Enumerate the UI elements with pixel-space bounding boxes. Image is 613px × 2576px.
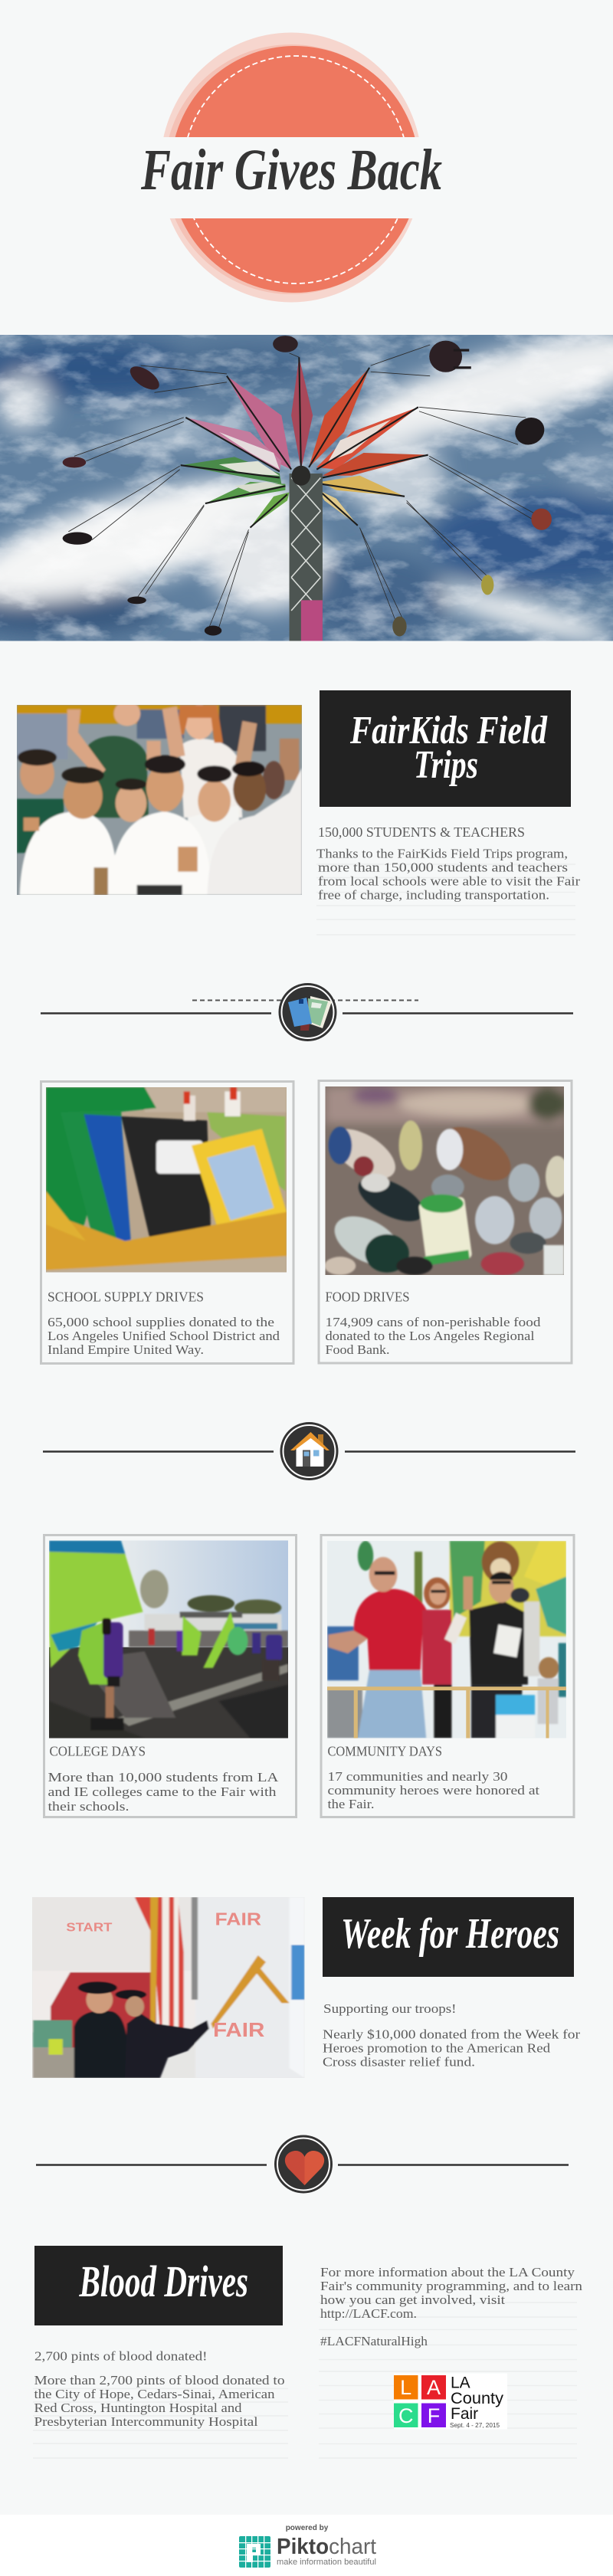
logo: LA County Fair: Sept. 4 - 27, 2015 (450, 2422, 500, 2429)
panel: FairKids heading box (320, 690, 571, 807)
photo: honor guard: FAIR (213, 2019, 264, 2041)
text block: More than 10,000 students from LA (48, 1770, 279, 1785)
footer (0, 2515, 613, 2576)
divider: notebooks (41, 983, 573, 1041)
text block: field trips (316, 824, 580, 935)
photo: school supplies (46, 1087, 287, 1272)
logo: LA County Fair: Fair (451, 2405, 478, 2423)
star arms (227, 376, 291, 470)
text block: more information: how you can get involved, visit (320, 2293, 505, 2307)
text block (48, 1315, 280, 1357)
logo: LA County Fair: F (428, 2404, 440, 2427)
divider: house (43, 1422, 575, 1480)
divider: heart (36, 2135, 569, 2193)
title badge (130, 32, 460, 302)
text block: donated to the Los Angeles Regional (325, 1329, 535, 1343)
wordmark: Piktochart (277, 2535, 376, 2559)
panel: Blood Drives heading box (34, 2246, 283, 2325)
photo: college parade (49, 1540, 288, 1738)
text block: more information (319, 2265, 583, 2458)
logo: LA County Fair: L (400, 2376, 411, 2399)
text block: blood drives: More than 2,700 pints of blood donated to (34, 2373, 285, 2388)
icon: piktochart logo (239, 2536, 270, 2568)
photo: honor guard: FAIR (215, 1909, 261, 1929)
text block (325, 1315, 541, 1357)
panel: college days (44, 1535, 296, 1817)
hero photo: swing ride against cloudy sky (0, 335, 613, 641)
icon: notebooks (279, 983, 337, 1041)
photo: community heroes (327, 1541, 566, 1738)
panel: school supply drives (41, 1082, 293, 1364)
title: Fair Gives Back (140, 138, 442, 202)
photo: kids (17, 705, 302, 895)
logo: LA County Fair: County (451, 2390, 504, 2407)
text block: field trips: more than 150,000 students and teachers (318, 860, 568, 875)
photo: cans (325, 1086, 564, 1275)
text block: field trips: 150,000 STUDENTS & TEACHERS (318, 824, 525, 840)
photo: honor guard (32, 1897, 305, 2078)
powered by: powered by (286, 2524, 329, 2532)
logo: LA County Fair (394, 2374, 507, 2429)
heading: FOOD DRIVES (325, 1289, 409, 1304)
panel: Week for Heroes heading box (323, 1897, 574, 1977)
heading: COLLEGE DAYS (49, 1744, 146, 1759)
panel: FairKids heading box: Trips (414, 743, 478, 787)
text block: week for heroes: Nearly $10,000 donated from the Week for (323, 2027, 580, 2041)
text block: field trips: Thanks to the FairKids Field Trips program, (316, 846, 568, 861)
text block: field trips: free of charge, including transportation. (318, 887, 549, 903)
text block: and IE colleges came to the Fair with (48, 1785, 277, 1799)
text block: Inland Empire United Way. (48, 1342, 204, 1357)
photo: honor guard: START (66, 1920, 113, 1934)
panel: food drives (319, 1080, 572, 1363)
text block: community heroes were honored at (328, 1783, 539, 1798)
text block: week for heroes: Supporting our troops! (323, 2001, 457, 2016)
logo: LA County Fair: LA (451, 2374, 470, 2392)
panel: FairKids heading box: FairKids Field (349, 709, 548, 752)
text block: field trips: from local schools were able to visit the Fair (318, 873, 580, 889)
text block: week for heroes (323, 2001, 580, 2069)
text block: week for heroes: Heroes promotion to the American Red (323, 2041, 551, 2055)
logo: LA County Fair: A (427, 2376, 441, 2399)
text block: blood drives: the City of Hope, Cedars-Sinai, American (34, 2387, 275, 2401)
text block: week for heroes: Cross disaster relief fund. (323, 2055, 475, 2069)
icon: house (280, 1422, 339, 1480)
text block: blood drives: Presbyterian Intercommunity Hospital (34, 2414, 258, 2429)
tower (290, 474, 323, 641)
swing seats (63, 336, 552, 637)
text block: blood drives: 2,700 pints of blood donated! (34, 2349, 207, 2363)
heading: COMMUNITY DAYS (328, 1744, 442, 1759)
text block: their schools. (48, 1799, 129, 1814)
panel: Blood Drives heading box: Blood Drives (79, 2256, 248, 2306)
swing cables (68, 345, 539, 628)
text block: 65,000 school supplies donated to the (48, 1315, 274, 1329)
logo: LA County Fair: C (398, 2404, 413, 2427)
text block: Food Bank. (325, 1342, 389, 1357)
text block: more information: http://LACF.com. (320, 2306, 417, 2321)
text block: blood drives (33, 2349, 288, 2458)
text block (328, 1769, 539, 1811)
heading: SCHOOL SUPPLY DRIVES (48, 1289, 204, 1304)
text block: more information: Fair's community programming, and to learn (320, 2279, 583, 2293)
text block: blood drives: Red Cross, Huntington Hospital and (34, 2401, 242, 2415)
text block: 17 communities and nearly 30 (328, 1769, 507, 1784)
text block: more information: #LACFNaturalHigh (320, 2334, 428, 2348)
panel: community days (321, 1535, 574, 1817)
text block: more information: For more information about the LA County (320, 2265, 575, 2279)
text block: Los Angeles Unified School District and (48, 1329, 280, 1343)
text block: the Fair. (328, 1797, 374, 1811)
text block: 174,909 cans of non-perishable food (325, 1315, 541, 1329)
icon: heart (274, 2135, 333, 2193)
text block (48, 1770, 279, 1814)
tagline: make information beautiful (277, 2558, 376, 2567)
